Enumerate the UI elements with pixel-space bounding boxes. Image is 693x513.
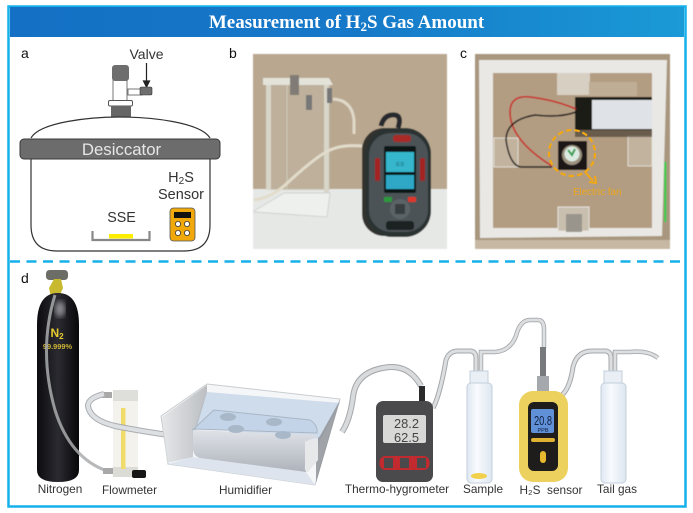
equipment labels: Tail gas <box>597 482 637 496</box>
H2S sensor device: PPB <box>537 428 549 434</box>
battery pack <box>575 97 652 130</box>
SSE label: SSE <box>107 210 136 226</box>
dashed divider <box>10 260 684 263</box>
H2S sensor device <box>519 347 568 482</box>
label d: d <box>21 270 29 286</box>
desiccator vessel <box>20 117 220 251</box>
fan pointer arrow <box>585 172 596 183</box>
sensor label: 2 <box>179 176 185 187</box>
tube thermo-hygrometer to sample bottle <box>433 351 476 408</box>
label a: a <box>21 45 29 61</box>
fan highlight circle <box>549 130 595 176</box>
nitrogen cylinder: 2 <box>59 332 64 341</box>
SSE tray <box>92 231 150 240</box>
title banner <box>10 7 684 37</box>
equipment labels: Thermo-hygrometer <box>345 482 449 496</box>
equipment labels: Nitrogen <box>38 482 82 496</box>
tube from cylinder to flowmeter <box>46 295 107 471</box>
label b: b <box>229 45 237 61</box>
nitrogen cylinder <box>37 270 79 482</box>
panel a: desiccator schematic <box>20 45 220 251</box>
tube sample bottle to sensor <box>481 320 544 372</box>
panel b: photo of chamber and detector <box>253 54 447 249</box>
humidifier <box>161 384 340 485</box>
fan label: Electric fan <box>573 187 621 198</box>
thermo-hygrometer <box>376 386 433 482</box>
tail gas bottle <box>601 371 626 483</box>
equipment labels: Humidifier <box>219 483 272 497</box>
valve assembly <box>108 65 152 118</box>
acrylic chamber <box>254 75 362 217</box>
nitrogen cylinder: N <box>50 326 59 340</box>
nitrogen cylinder: 99.999% <box>43 342 73 351</box>
desiccator vessel: Desiccator <box>82 140 162 159</box>
panel a: desiccator schematic: Sensor <box>158 187 204 203</box>
flowmeter <box>102 390 146 478</box>
title: Measurement of H <box>209 12 360 33</box>
equipment labels: Flowmeter <box>102 483 157 497</box>
equipment labels: Sample <box>463 482 503 496</box>
title: 2 <box>360 19 367 34</box>
tube from flowmeter to humidifier <box>88 394 192 438</box>
handheld gas detector <box>362 115 431 237</box>
panel d: gas flow apparatus <box>21 270 658 497</box>
valve arrow <box>144 63 150 87</box>
tail gas outlet tube <box>615 352 658 372</box>
tube sensor to tail gas <box>562 351 611 395</box>
panel c: photo of chamber top with fan <box>475 54 670 249</box>
fan <box>558 141 587 170</box>
equipment labels <box>38 482 637 497</box>
equipment labels: H₂S sensor <box>520 483 583 497</box>
wires <box>510 97 576 166</box>
sensor label: H <box>168 170 179 186</box>
label c: c <box>460 45 467 61</box>
sensor label: S <box>184 170 194 186</box>
sample bottle <box>467 371 492 483</box>
tube humidifier to thermo-hygrometer <box>342 367 421 432</box>
thermo-hygrometer: 62.5 <box>394 430 419 445</box>
thermo-hygrometer: 28.2 <box>394 416 419 431</box>
title: S Gas Amount <box>367 12 485 33</box>
sensor icon <box>170 208 195 241</box>
H2S sensor device: 20.8 <box>534 413 552 428</box>
valve label: Valve <box>130 46 164 62</box>
handheld gas detector: 0.0 <box>396 162 404 168</box>
